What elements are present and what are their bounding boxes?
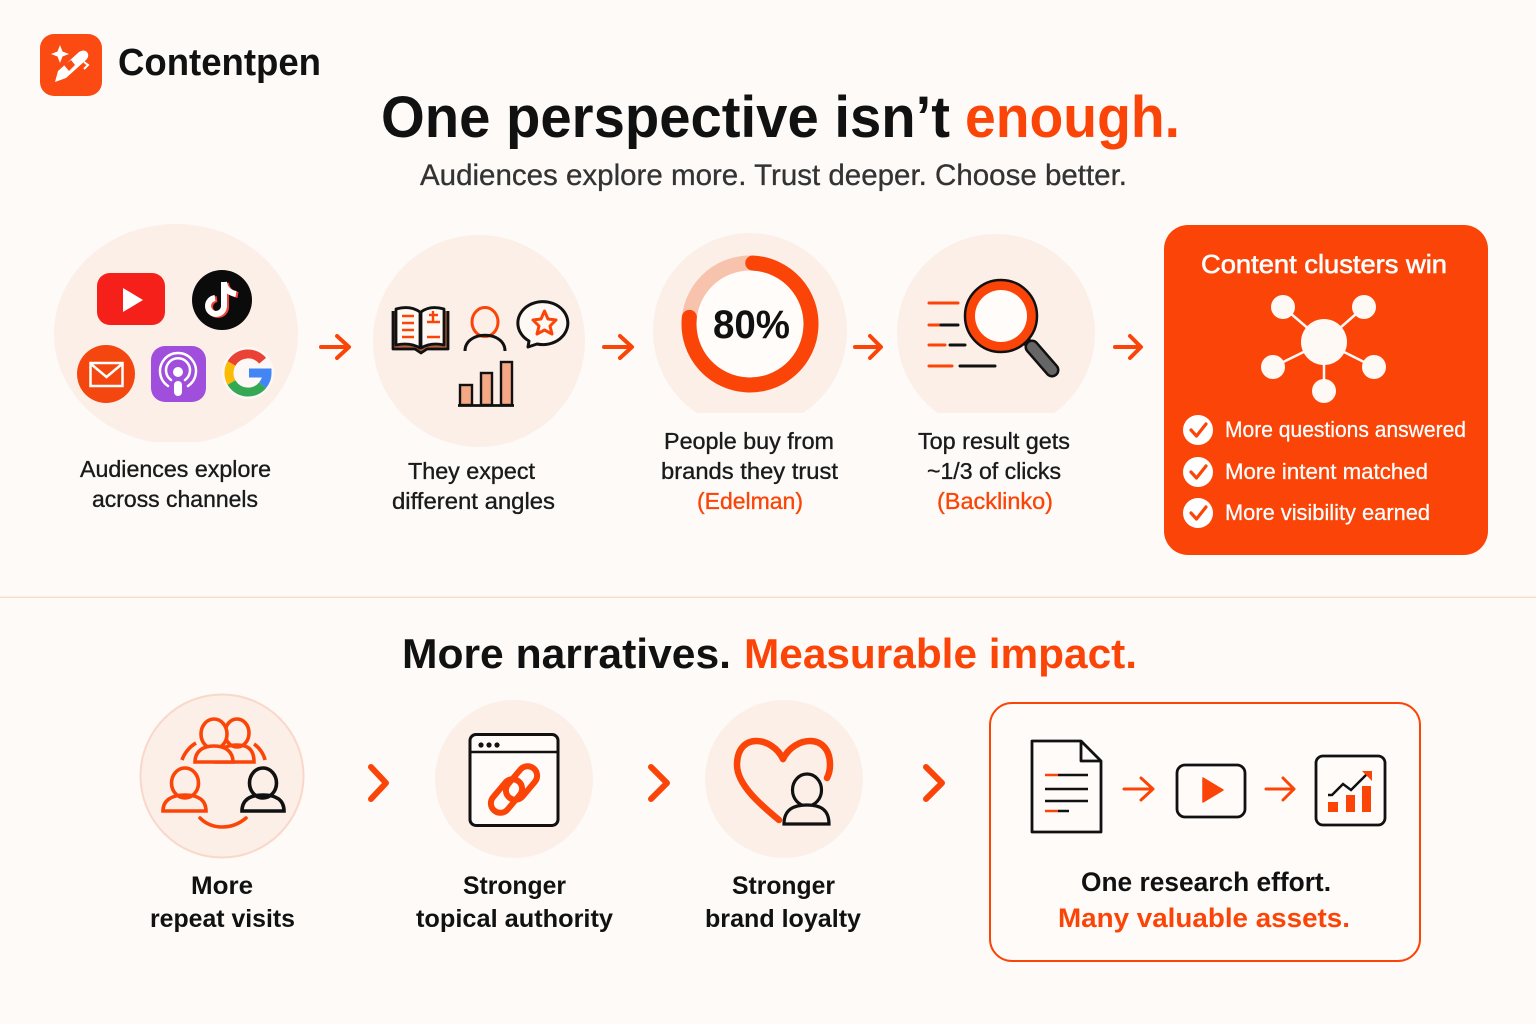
panel text	[1058, 867, 1350, 933]
checklist item	[1183, 415, 1466, 445]
donut chart 80%	[686, 260, 814, 388]
donut chart 80%: 80%	[713, 303, 790, 347]
section heading: More narratives.	[402, 630, 731, 677]
checklist item: More questions answered	[1225, 417, 1466, 442]
circle background	[140, 694, 304, 858]
arrow	[321, 336, 349, 358]
arrow	[1266, 778, 1294, 800]
caption: (Edelman)	[697, 488, 803, 514]
caption: different angles	[392, 488, 555, 514]
circle background	[897, 234, 1095, 432]
panel text: One research effort.	[1081, 867, 1331, 897]
caption: Top result gets	[918, 428, 1070, 454]
caption: ~1/3 of clicks	[927, 458, 1061, 484]
brand name: Contentpen	[118, 42, 321, 84]
caption: People buy from	[664, 428, 834, 454]
step: audiences explore across channels	[54, 224, 298, 512]
section heading: Measurable impact.	[744, 630, 1137, 677]
caption	[705, 872, 861, 933]
icon: growth chart	[1316, 756, 1385, 825]
search result lines	[929, 303, 995, 366]
icon: person	[465, 308, 505, 351]
icon: magnifying glass	[965, 280, 1052, 370]
panel: one research effort	[990, 703, 1420, 961]
chevron	[926, 767, 942, 799]
subtitle: Audiences explore more. Trust deeper. Choose better.	[420, 159, 1127, 192]
caption	[150, 872, 295, 933]
logo	[40, 34, 321, 96]
circle background	[705, 700, 863, 858]
caption: topical authority	[416, 905, 613, 933]
caption	[80, 456, 271, 512]
panel heading: Content clusters win	[1201, 249, 1447, 279]
circle background	[653, 233, 847, 429]
circle background	[435, 700, 593, 858]
icon: group of people	[163, 719, 284, 827]
icon: document	[1032, 741, 1101, 832]
icon: browser with link	[470, 734, 558, 826]
outcome: more repeat visits	[140, 694, 304, 933]
checklist item: More visibility earned	[1225, 500, 1430, 525]
step: top result gets a third of clicks	[897, 234, 1095, 514]
caption: repeat visits	[150, 905, 295, 933]
caption	[918, 428, 1070, 514]
caption: Stronger	[732, 872, 835, 900]
panel text: Many valuable assets.	[1058, 903, 1350, 933]
icon: TikTok	[192, 270, 252, 330]
section heading	[402, 630, 1137, 677]
icon: YouTube	[97, 273, 165, 325]
icon: heart with person	[737, 741, 830, 824]
caption: Audiences explore	[80, 456, 271, 482]
icon: book	[393, 308, 448, 353]
chevron	[371, 767, 386, 799]
caption: More	[191, 872, 253, 900]
chevron	[651, 767, 667, 799]
caption: (Backlinko)	[937, 488, 1053, 514]
icon: podcasts	[151, 346, 206, 402]
icon: logo pen	[40, 34, 102, 96]
caption: They expect	[408, 458, 536, 484]
title: One perspective isn’t	[381, 85, 950, 150]
caption: across channels	[92, 486, 258, 512]
caption: brand loyalty	[705, 905, 861, 933]
checklist item	[1183, 457, 1428, 487]
caption: Stronger	[463, 872, 566, 900]
caption	[661, 428, 839, 514]
caption: brands they trust	[661, 458, 839, 484]
circle background	[373, 235, 585, 447]
arrow	[855, 336, 881, 358]
icon: bar chart	[458, 362, 514, 406]
icon: video	[1177, 765, 1245, 817]
circle background	[54, 224, 298, 444]
outcome: stronger topical authority	[416, 700, 613, 933]
caption	[392, 458, 555, 514]
checklist item: More intent matched	[1225, 459, 1428, 484]
outcome: stronger brand loyalty	[705, 700, 863, 933]
icon: email	[77, 345, 135, 403]
arrow	[1124, 778, 1153, 800]
checklist item	[1183, 498, 1430, 528]
step: they expect different angles	[373, 235, 585, 514]
caption	[416, 872, 613, 933]
icon: cluster network	[1261, 295, 1386, 403]
icon: speech bubble with star	[518, 302, 568, 347]
step: people buy from brands they trust	[653, 233, 847, 514]
panel: content clusters win	[1164, 225, 1488, 555]
icon: Google	[222, 347, 274, 399]
title: enough.	[965, 85, 1180, 150]
arrow	[1115, 336, 1141, 358]
arrow	[604, 336, 632, 358]
